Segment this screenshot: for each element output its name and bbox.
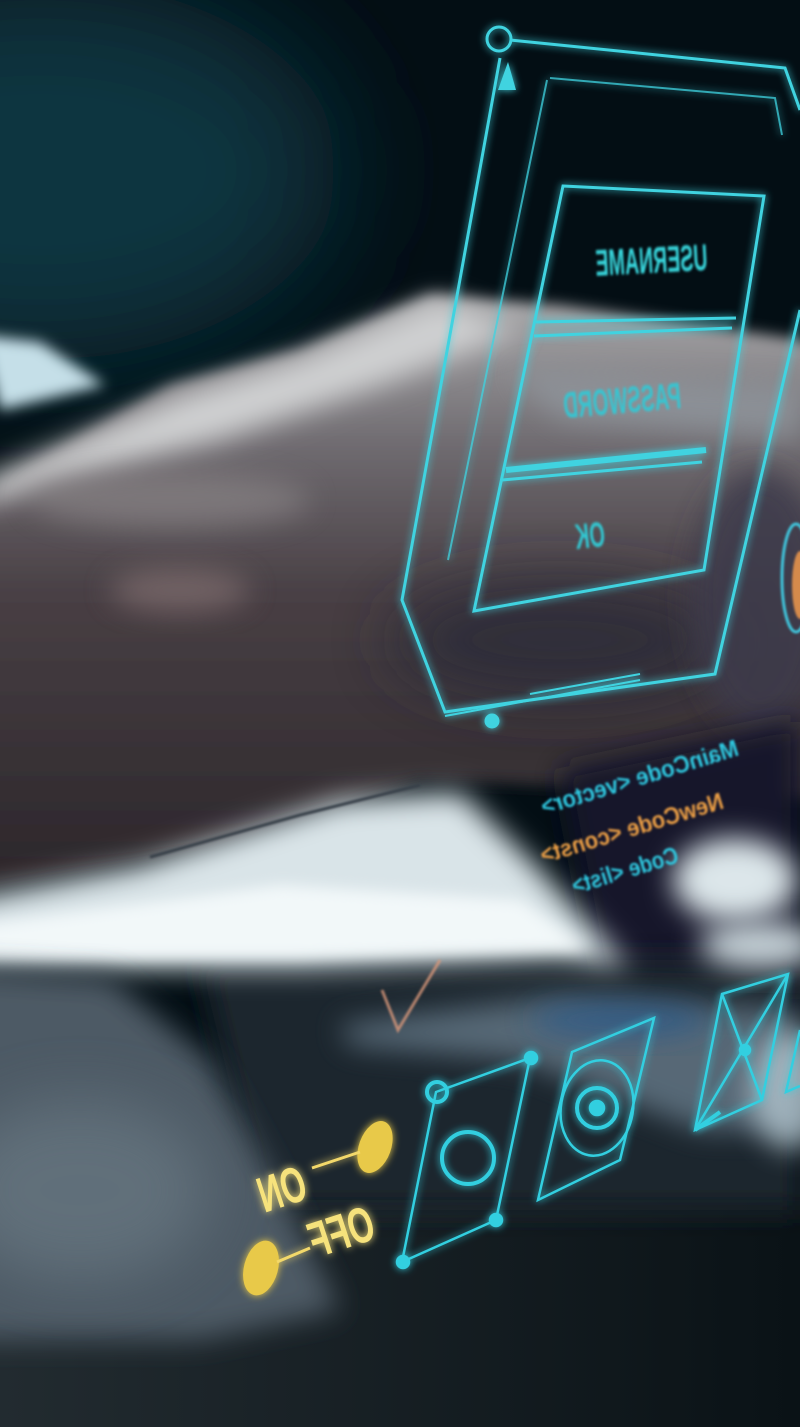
blurred lower hand	[0, 785, 800, 969]
login hologram panel	[402, 27, 800, 727]
code line: list: Code <list>	[569, 842, 682, 900]
check mark	[382, 960, 440, 1030]
code line: constant: NewCode <const>	[537, 788, 727, 869]
side dial icon	[782, 524, 800, 632]
form box	[474, 186, 764, 611]
icon row	[397, 974, 800, 1268]
icon: circle tile	[397, 1052, 537, 1268]
code line: vector: MainCode <vector>	[538, 735, 742, 821]
password label: PASSWORD	[562, 375, 683, 427]
ok label: OK	[573, 514, 607, 557]
icon: envelope tile	[695, 974, 788, 1130]
icon: target tile	[538, 1018, 654, 1200]
toggle: on: ON	[250, 1155, 314, 1224]
toggle: on	[250, 1116, 399, 1224]
blurred sleeve	[0, 968, 340, 1340]
icon: partial tile	[786, 1030, 800, 1092]
blurred upper hand	[0, 295, 800, 895]
slider lines	[445, 674, 640, 716]
triangle marker	[498, 62, 516, 90]
panel inner frame	[448, 78, 782, 560]
toggle: off: OFF	[301, 1195, 382, 1269]
toggle: off	[237, 1195, 382, 1299]
toggle switches	[237, 1116, 399, 1299]
node circle	[487, 27, 511, 51]
panel outer frame	[402, 40, 800, 712]
username label: USERNAME	[594, 237, 708, 285]
slider dots	[486, 715, 498, 727]
form dividers	[502, 318, 736, 480]
lower dark keyboard and code area	[200, 720, 800, 1210]
code lines	[537, 735, 742, 900]
